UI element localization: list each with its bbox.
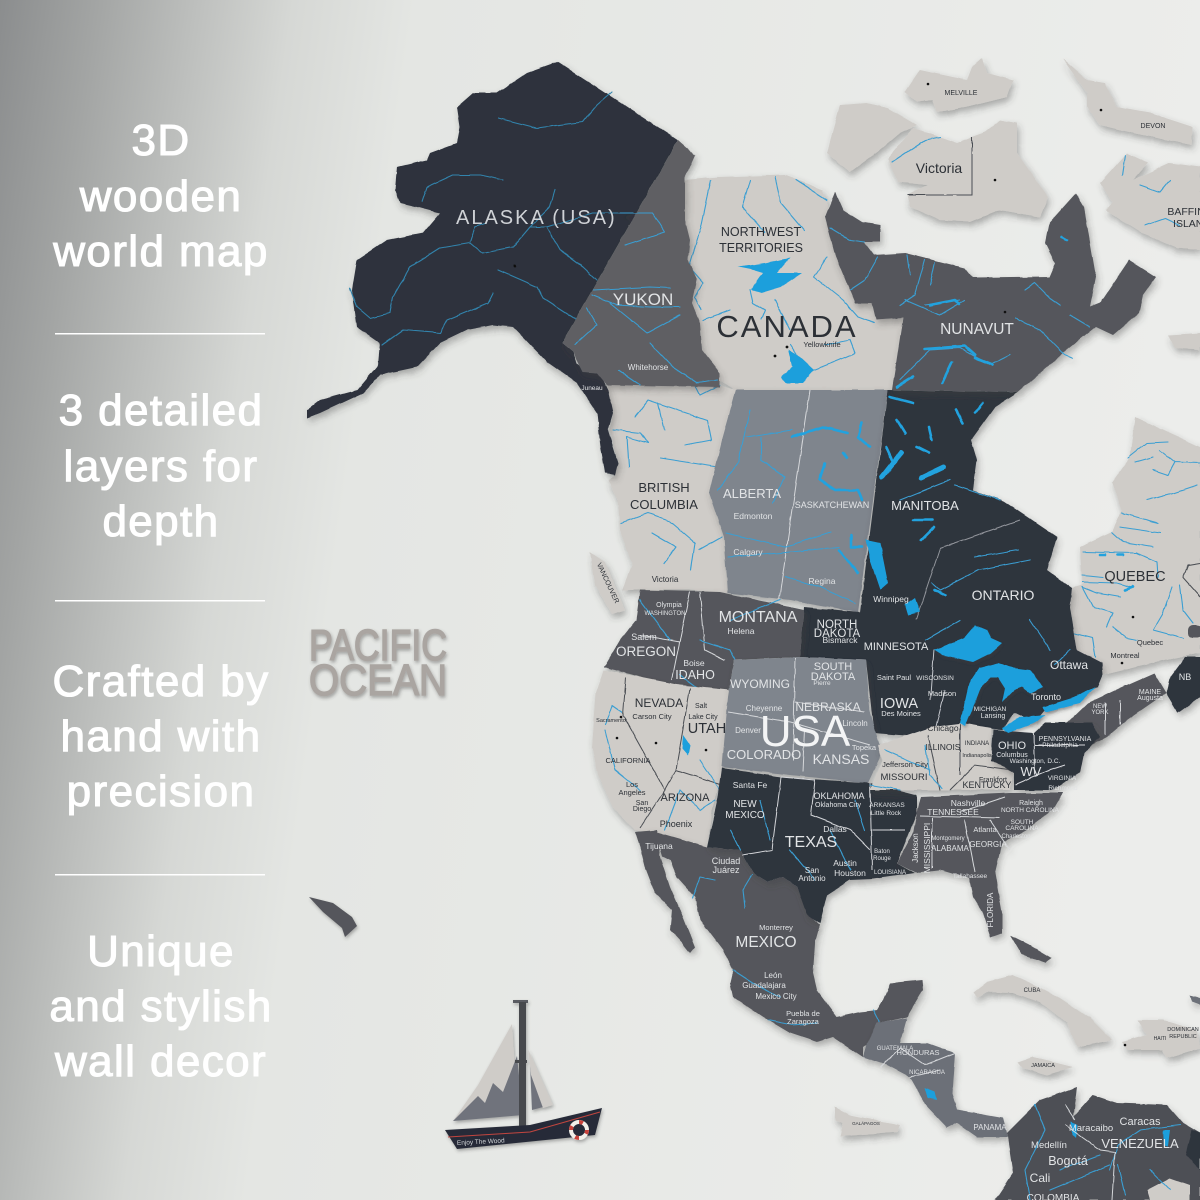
labels on dark pieces: Philadelphia (1042, 742, 1078, 749)
labels on dark pieces: Bismarck (823, 635, 858, 645)
panel: Yukon (562, 140, 720, 387)
labels on light pieces: REPUBLIC (1169, 1034, 1197, 1040)
labels on dark pieces: Salem (631, 632, 657, 642)
labels on dark pieces: Olympia (656, 602, 682, 609)
feature: crafted by hand: hand with (61, 712, 261, 761)
labels on light pieces: Chicago (927, 723, 959, 733)
labels on light pieces: BRITISH (638, 480, 690, 495)
labels on light pieces: NEVADA (635, 696, 683, 710)
labels on dark pieces: Rouge (873, 856, 892, 862)
labels on dark pieces: Antonio (798, 874, 826, 883)
labels on light pieces: Victoria (916, 160, 962, 176)
labels on dark pieces: VIRGINIA (1048, 775, 1077, 782)
labels on dark pieces: Whitehorse (628, 363, 669, 372)
labels on dark pieces: Boise (683, 658, 705, 668)
panel: American Southwest (592, 670, 730, 847)
panel: Nunavut (825, 192, 1156, 392)
panel: South America (995, 1087, 1200, 1200)
labels on dark pieces: Raleigh (1019, 800, 1043, 807)
labels on dark pieces: San (805, 866, 819, 875)
labels on dark pieces: Tallahassee (953, 873, 988, 880)
labels on dark pieces: HONDURAS (897, 1048, 939, 1057)
labels on light pieces: Montreal (1110, 651, 1140, 660)
lake: Great Bear (738, 258, 802, 293)
labels on dark pieces: Juárez (712, 865, 740, 875)
labels on dark pieces: OHIO (998, 740, 1026, 752)
text: Pacific Ocean cutout (309, 621, 447, 705)
labels on dark pieces: Maracaibo (1069, 1123, 1113, 1134)
labels on dark pieces: Regina (809, 576, 836, 586)
labels on dark pieces: PENNSYLVANIA (1039, 736, 1092, 743)
labels on dark pieces: MISSISSIPPI (922, 823, 932, 873)
labels on light pieces: DOMINICAN (1167, 1027, 1199, 1033)
labels on dark pieces: TEXAS (785, 834, 837, 851)
labels on light pieces: Angeles (618, 788, 646, 797)
panel: Pacific Northwest (604, 590, 804, 697)
labels on dark pieces: MONTANA (719, 609, 798, 626)
labels on dark pieces: OKLAHOMA (813, 791, 865, 801)
labels on dark pieces: MINNESOTA (864, 641, 929, 653)
labels on dark pieces: Tijuana (645, 841, 673, 851)
lake: Great Slave (781, 350, 814, 383)
labels on dark pieces: Augusta (1137, 695, 1163, 702)
panel: Central Midwest (870, 723, 1014, 790)
feature: 3D wooden world map: world map (52, 227, 269, 276)
labels on light pieces: Sacramento (596, 718, 626, 724)
panel: Manitoba, Ontario and upper Midwest (800, 390, 1103, 737)
labels on dark pieces: OREGON (616, 644, 676, 659)
labels on dark pieces: YORK (1091, 710, 1109, 716)
labels on dark pieces: Saint Paul (877, 673, 911, 682)
labels on dark pieces: YUKON (613, 290, 673, 309)
labels on dark pieces: Ciudad (712, 856, 740, 866)
labels on dark pieces: Medellín (1031, 1140, 1067, 1151)
labels on dark pieces: Monterrey (759, 923, 793, 932)
labels on dark pieces: Lansing (981, 713, 1005, 720)
labels on light pieces: CANADA (716, 309, 858, 344)
labels on light pieces: INDIANA (965, 741, 989, 747)
labels on dark pieces: SASKATCHEWAN (795, 500, 869, 510)
labels on dark pieces: ONTARIO (972, 587, 1034, 603)
labels on light pieces: DEVON (1141, 123, 1165, 130)
labels on dark pieces: Santa Fe (733, 780, 768, 790)
labels on light pieces: Yellowknife (803, 340, 841, 349)
labels on dark pieces: NB (1179, 672, 1191, 682)
labels on dark pieces: VENEZUELA (1101, 1136, 1179, 1151)
labels on dark pieces: WV (1021, 764, 1042, 779)
labels on dark pieces: TENNESSEE (927, 807, 979, 817)
labels on dark pieces: IDAHO (675, 668, 715, 682)
feature: 3 detailed layers: depth (102, 497, 220, 546)
labels on light pieces: Los (626, 780, 638, 789)
labels on dark pieces: Ottawa (1050, 658, 1088, 672)
icon: sailboat (445, 1000, 602, 1149)
labels on dark pieces: Denver (735, 726, 761, 735)
labels on dark pieces: WASHINGTON (644, 611, 686, 617)
labels on dark pieces: SOUTH (1011, 819, 1034, 826)
labels on dark pieces: ALASKA (USA) (456, 207, 617, 229)
labels on dark pieces: Zaragoza (787, 1017, 820, 1026)
labels on light pieces: San (636, 800, 648, 807)
labels on dark pieces: USA (760, 707, 851, 756)
labels on dark pieces: DAKOTA (811, 671, 856, 683)
labels on light pieces (596, 90, 1200, 1126)
labels on dark pieces: Montgomery (931, 836, 965, 842)
feature: 3D wooden world map: wooden (79, 172, 242, 221)
labels on light pieces: MISSOURI (881, 772, 927, 783)
sidebar: feature list (49, 116, 273, 1086)
panel: Southern US states (707, 768, 917, 923)
labels on dark pieces: CAROLINA (1005, 825, 1039, 832)
labels on dark pieces: SOUTH (814, 661, 852, 673)
panel: Central America (863, 1018, 1008, 1137)
feature: 3 detailed layers: layers for (64, 442, 258, 491)
labels on dark pieces: COLORADO (727, 747, 801, 762)
labels on dark pieces: LOUISIANA (874, 870, 906, 876)
labels on light pieces: Lake City (688, 714, 718, 721)
labels on light pieces: JAMAICA (1031, 1063, 1055, 1069)
panel: British Columbia (607, 385, 736, 593)
labels on light pieces: Salt (695, 703, 707, 710)
labels on dark pieces: Puebla de (786, 1009, 820, 1018)
labels on dark pieces: Little Rock (871, 810, 902, 817)
labels on dark pieces: Charleston (1001, 834, 1031, 840)
labels on dark pieces: Oklahoma City (815, 802, 861, 809)
labels on dark pieces: Cali (1030, 1171, 1050, 1185)
labels on light pieces: MELVILLE (945, 90, 978, 97)
labels on dark pieces: PANAMA (973, 1123, 1007, 1132)
feature: wall decor (49, 927, 273, 1086)
panel: Alberta and Saskatchewan (709, 390, 888, 612)
feature: crafted by hand: precision (67, 767, 255, 816)
labels on dark pieces: Lincoln (842, 719, 868, 728)
panel: New England and Maritimes (1060, 657, 1200, 745)
labels on dark pieces: Columbus (996, 752, 1028, 759)
labels on light pieces: ARIZONA (661, 792, 710, 804)
labels on light pieces: Quebec (1137, 638, 1163, 647)
labels on dark pieces (456, 207, 1191, 1200)
feature: wall decor: Unique (87, 927, 235, 976)
wooden map pieces (307, 58, 1200, 1200)
labels on dark pieces: Houston (834, 868, 866, 878)
labels on light pieces: Victoria (652, 575, 679, 584)
labels on dark pieces: WISCONSIN (916, 675, 954, 682)
labels on dark pieces: Winnipeg (873, 594, 909, 604)
island label: Vancouver: VANCOUVER (595, 562, 620, 605)
labels on light pieces: COLUMBIA (630, 497, 698, 512)
feature: crafted by hand (53, 657, 269, 816)
panel: Quebec (1070, 417, 1200, 675)
labels on dark pieces: ALABAMA (931, 844, 970, 853)
labels on dark pieces: MEXICO (735, 934, 797, 951)
island: Vancouver (590, 552, 625, 614)
island: Pacific small (309, 897, 357, 937)
labels on light pieces: Indianapolis (962, 753, 992, 759)
labels on dark pieces: GUATEMALA (877, 1046, 913, 1052)
panel: Mid-Atlantic (991, 723, 1100, 790)
labels on dark pieces: Toronto (1031, 692, 1061, 702)
labels on light pieces: TERRITORIES (719, 241, 803, 255)
labels on dark pieces: NICARAGUA (909, 1070, 945, 1076)
feature: 3 detailed layers: 3 detailed (59, 386, 263, 435)
panel: Southeastern US (897, 793, 1063, 937)
labels on dark pieces: Cheyenne (746, 704, 783, 713)
islands: Arctic (827, 58, 1200, 350)
labels on dark pieces: Washington, D.C. (1010, 758, 1061, 765)
panel: Alaska (307, 62, 678, 475)
labels on light pieces: CUBA (1024, 988, 1040, 994)
labels on dark pieces: Dallas (823, 824, 847, 834)
labels on dark pieces: GEORGIA (969, 840, 1007, 849)
feature: wall decor: and stylish (49, 982, 273, 1031)
labels on light pieces: Phoenix (660, 819, 693, 829)
labels on dark pieces: Baton (874, 849, 890, 855)
labels on light pieces: ILLINOIS (926, 742, 961, 752)
labels on dark pieces: MICHIGAN (974, 706, 1007, 713)
labels on dark pieces: Edmonton (734, 511, 773, 521)
panel: Great Lakes (934, 625, 1096, 733)
icon: sailboat: Enjoy The Wood (457, 1137, 505, 1147)
feature: 3D wooden world map (52, 116, 269, 276)
panel: Great Plains (722, 657, 882, 783)
labels on dark pieces: NUNAVUT (940, 321, 1014, 338)
feature: wall decor: wall decor (54, 1037, 267, 1086)
labels on dark pieces: NEBRASKA (795, 700, 861, 714)
feature: 3 detailed layers (59, 386, 263, 546)
labels on dark pieces: ARKANSAS (869, 802, 905, 809)
labels on light pieces: Carson City (632, 712, 672, 721)
labels on dark pieces: Juneau (581, 385, 603, 392)
labels on light pieces: HAITI (1154, 1036, 1166, 1042)
city dots (616, 83, 1134, 1046)
labels on dark pieces: WYOMING (730, 677, 790, 691)
labels on light pieces: Jefferson City (882, 760, 928, 769)
labels on dark pieces: FLORIDA (986, 892, 995, 927)
labels on light pieces: Diego (633, 806, 651, 813)
labels on light pieces: GALÁPAGOS (852, 1120, 880, 1126)
labels on light pieces: Frankfort (979, 777, 1007, 784)
labels on dark pieces: ALBERTA (723, 486, 781, 501)
panel: Mexico (635, 830, 923, 1057)
feature: 3D wooden world map: 3D (131, 116, 191, 165)
labels on dark pieces: León (764, 971, 782, 980)
labels on dark pieces: Nashville (951, 798, 986, 808)
text: Pacific Ocean cutout: OCEAN (309, 656, 447, 705)
labels on dark pieces: Helena (728, 626, 755, 636)
text: Pacific Ocean cutout: PACIFIC (309, 621, 447, 670)
labels on light pieces: CALIFORNIA (605, 756, 651, 765)
labels on dark pieces: Pierre (813, 680, 831, 687)
labels on dark pieces: KANSAS (813, 751, 869, 767)
panel: Northwest Territories (685, 175, 903, 390)
labels on dark pieces: MANITOBA (891, 498, 959, 513)
labels on dark pieces: Atlanta (973, 825, 997, 834)
labels on dark pieces: MEXICO (725, 810, 765, 821)
labels on dark pieces: NORTH (817, 619, 857, 631)
labels on dark pieces: Jackson (911, 833, 920, 863)
labels on light pieces: QUEBEC (1104, 569, 1166, 585)
feature: crafted by hand: Crafted by (53, 657, 269, 706)
labels on dark pieces: Topeka (852, 743, 877, 752)
labels on dark pieces: Madison (928, 689, 956, 698)
labels on dark pieces: DAKOTA (814, 628, 861, 640)
labels on dark pieces: Richmond (1048, 785, 1078, 792)
labels on dark pieces: Caracas (1120, 1116, 1161, 1128)
labels on dark pieces: Calgary (733, 547, 763, 557)
labels on dark pieces: Guadalajara (742, 981, 786, 990)
labels on dark pieces: NEW (1093, 704, 1107, 710)
islands: Caribbean (835, 935, 1200, 1137)
labels on dark pieces: Bogotá (1048, 1154, 1088, 1168)
labels on light pieces: KENTUCKY (962, 780, 1012, 790)
labels on dark pieces: IOWA (880, 696, 918, 712)
labels on dark pieces: NORTH CAROLINA (1001, 807, 1060, 814)
labels on light pieces: UTAH (688, 721, 726, 737)
labels on dark pieces: Des Moines (881, 709, 921, 718)
labels on dark pieces: MAINE (1139, 689, 1161, 696)
labels on dark pieces: Mexico City (755, 992, 797, 1001)
labels on dark pieces: NEW (733, 799, 757, 810)
labels on dark pieces: Austin (833, 858, 857, 868)
labels on light pieces: NORTHWEST (721, 225, 802, 239)
